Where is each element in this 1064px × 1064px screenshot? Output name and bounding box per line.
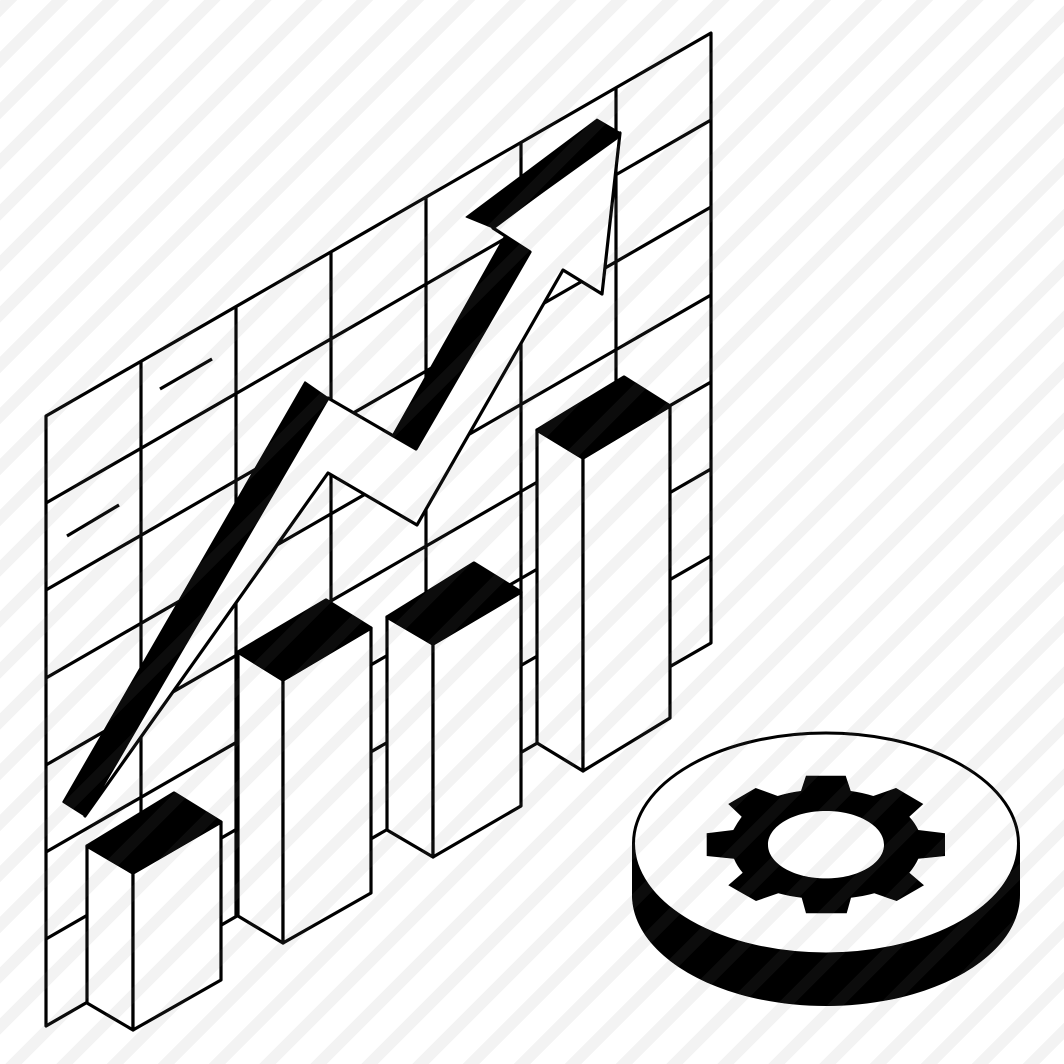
arrow shadow: lower shaft [63, 382, 328, 816]
bar 2 [238, 600, 371, 943]
grid label dash upper [160, 359, 212, 389]
bar 3 [387, 563, 521, 857]
wall grid panel [46, 33, 711, 1026]
arrow face [85, 133, 620, 816]
arrow shadow: head edge [466, 119, 621, 228]
bar 4 [537, 377, 670, 771]
grid label dash lower [67, 505, 119, 536]
arrow shadow: middle shaft [392, 237, 530, 449]
rising arrow [63, 119, 621, 816]
gear disc [632, 733, 1020, 1006]
icon: gear [707, 776, 945, 913]
disc side [632, 845, 1020, 1006]
bar 1 [87, 793, 221, 1030]
disc top [634, 733, 1018, 954]
